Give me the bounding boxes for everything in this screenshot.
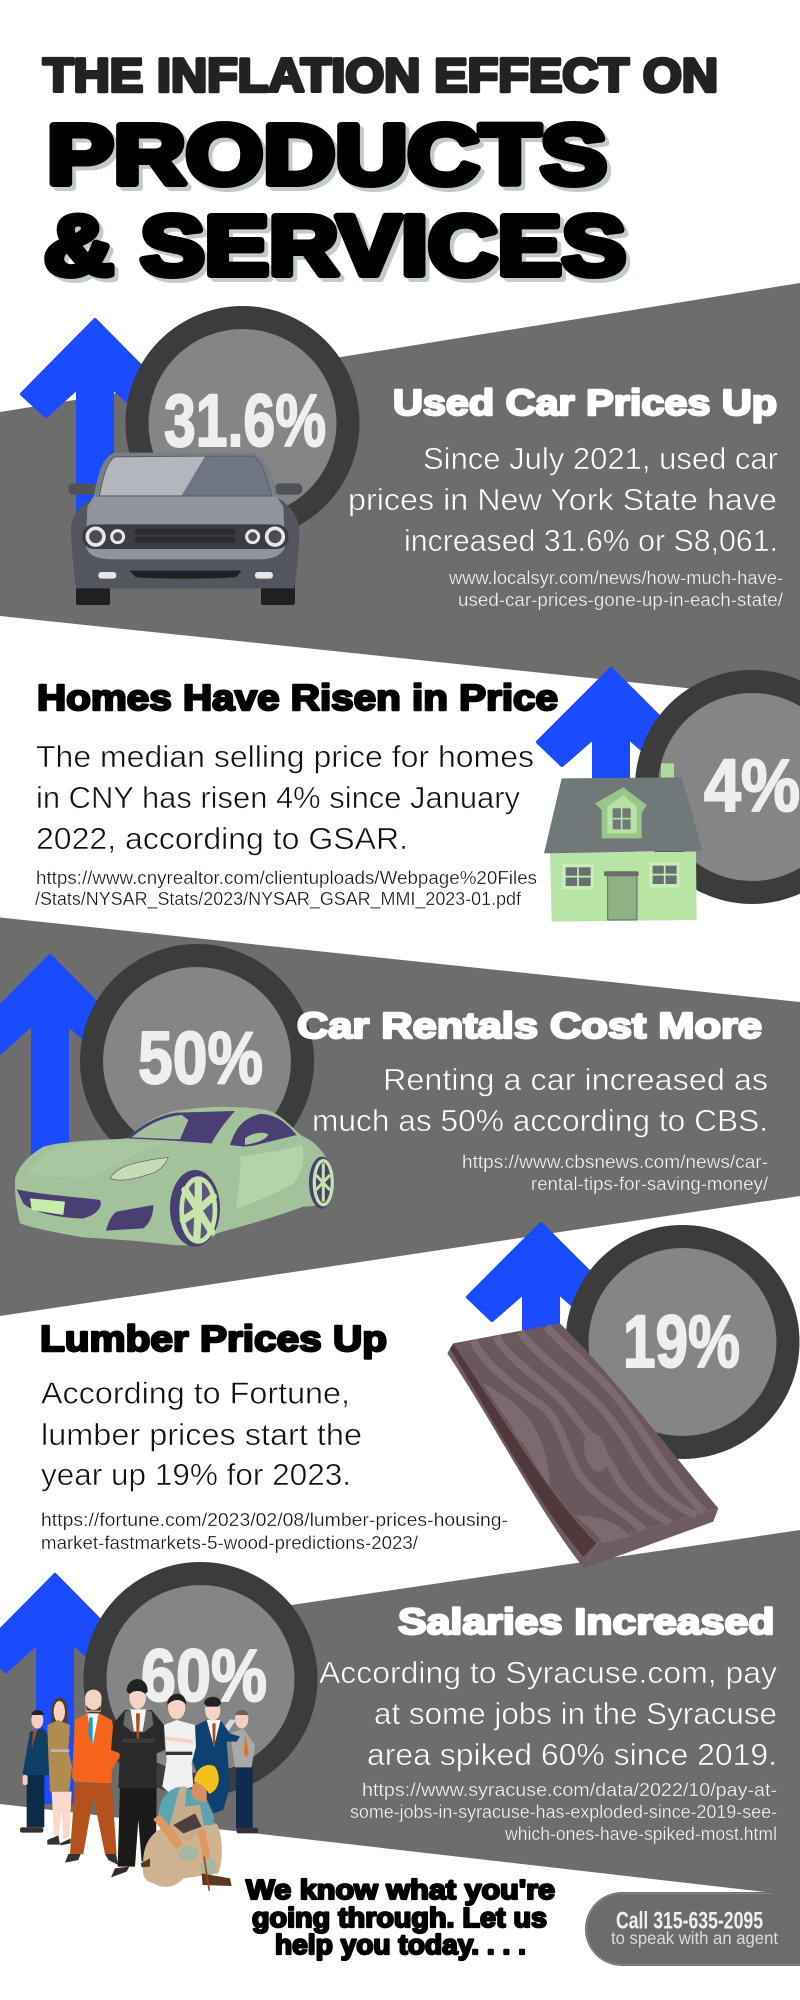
person: woman in white xyxy=(162,1694,196,1793)
stat: 31.6%: 31.6% xyxy=(164,379,326,462)
title xyxy=(43,48,718,292)
call to action text: We know what you're xyxy=(246,1874,555,1905)
person: orange jacket xyxy=(65,1690,120,1865)
source url xyxy=(350,1780,777,1844)
icon: car front xyxy=(68,453,302,605)
title: PRODUCTS xyxy=(47,108,607,202)
title: & SERVICES xyxy=(44,198,626,292)
heading: Used Car Prices Up xyxy=(393,382,777,423)
body text: in CNY has risen 4% since January xyxy=(36,780,520,815)
source url xyxy=(35,868,537,910)
body text: According to Syracuse.com, pay xyxy=(319,1655,778,1690)
body text: prices in New York State have xyxy=(348,482,777,517)
body text xyxy=(348,441,778,558)
arrow: up xyxy=(0,956,123,1160)
source url xyxy=(448,568,783,610)
call to action text xyxy=(246,1874,555,1960)
source url: /Stats/NYSAR_Stats/2023/NYSAR_GSAR_MMI_2023-01.pdf xyxy=(35,889,522,910)
stat: 19%: 19% xyxy=(623,1300,740,1383)
body text: much as 50% according to CBS. xyxy=(312,1103,768,1138)
source url: some-jobs-in-syracuse-has-exploded-since-2019-see- xyxy=(350,1802,777,1822)
source url: market-fastmarkets-5-wood-predictions-2023/ xyxy=(41,1533,418,1553)
body text xyxy=(36,739,534,856)
call to action text: help you today. . . . xyxy=(275,1929,526,1960)
source url: www.localsyr.com/news/how-much-have- xyxy=(448,568,783,588)
heading: Homes Have Risen in Price xyxy=(37,677,558,718)
person: navy jacket xyxy=(20,1710,51,1833)
badge circle xyxy=(577,1236,788,1448)
icon: sports car xyxy=(15,1107,334,1247)
source url: https://www.cbsnews.com/news/car- xyxy=(462,1152,768,1172)
person: grey sweater xyxy=(220,1710,258,1833)
badge circle xyxy=(95,1574,306,1784)
person: woman in tan dress xyxy=(47,1697,72,1845)
panel: lumber xyxy=(40,1224,788,1568)
body text xyxy=(41,1376,362,1492)
source url: https://www.syracuse.com/data/2022/10/pay-at- xyxy=(362,1780,777,1800)
person: center black suit xyxy=(111,1679,165,1877)
source url xyxy=(41,1510,508,1553)
contact pill: to speak with an agent xyxy=(611,1928,778,1948)
heading: Car Rentals Cost More xyxy=(297,1005,762,1046)
panel: used car prices xyxy=(22,318,783,610)
arrow: up xyxy=(22,320,168,515)
badge circle xyxy=(646,682,800,892)
heading: Salaries Increased xyxy=(398,1601,774,1642)
panel: homes xyxy=(35,669,800,922)
icon: house xyxy=(544,763,703,922)
panel: car rentals xyxy=(0,956,768,1247)
icon: wood plank xyxy=(447,1323,718,1568)
body text: Since July 2021, used car xyxy=(423,441,778,476)
source url: https://www.cnyrealtor.com/clientuploads/Webpage%20Files xyxy=(36,868,537,888)
body text: at some jobs in the Syracuse xyxy=(374,1696,777,1731)
contact pill xyxy=(585,1892,800,1966)
arrow: up xyxy=(468,1224,614,1340)
body text: Renting a car increased as xyxy=(383,1062,768,1097)
body text: 2022, according to GSAR. xyxy=(36,821,408,856)
icon: group of workers xyxy=(20,1679,258,1891)
panel: salaries xyxy=(0,1574,778,1891)
badge circle xyxy=(137,318,348,528)
heading: Lumber Prices Up xyxy=(40,1318,387,1359)
body text: area spiked 60% since 2019. xyxy=(367,1737,777,1772)
source url: used-car-prices-gone-up-in-each-state/ xyxy=(458,590,783,610)
source url: which-ones-have-spiked-most.html xyxy=(504,1824,777,1844)
body text: The median selling price for homes xyxy=(36,739,534,774)
person: kneeling worker xyxy=(141,1765,232,1891)
person: blue suit xyxy=(188,1697,240,1813)
arrow: up xyxy=(538,669,684,790)
body text: year up 19% for 2023. xyxy=(41,1457,351,1492)
body text xyxy=(319,1655,778,1772)
body text: lumber prices start the xyxy=(41,1417,362,1452)
title: THE INFLATION EFFECT ON xyxy=(43,48,718,101)
source url xyxy=(462,1152,768,1194)
source url: rental-tips-for-saving-money/ xyxy=(531,1174,768,1194)
source url: https://fortune.com/2023/02/08/lumber-prices-housing- xyxy=(41,1510,508,1530)
body text xyxy=(312,1062,768,1138)
arrow: up xyxy=(0,1575,128,1802)
badge circle xyxy=(92,956,302,1166)
body text: increased 31.6% or S8,061. xyxy=(404,523,778,558)
stat: 60%: 60% xyxy=(141,1634,267,1717)
body text: According to Fortune, xyxy=(41,1376,350,1410)
stat: 50%: 50% xyxy=(138,1016,263,1100)
call to action text: going through. Let us xyxy=(252,1902,547,1933)
